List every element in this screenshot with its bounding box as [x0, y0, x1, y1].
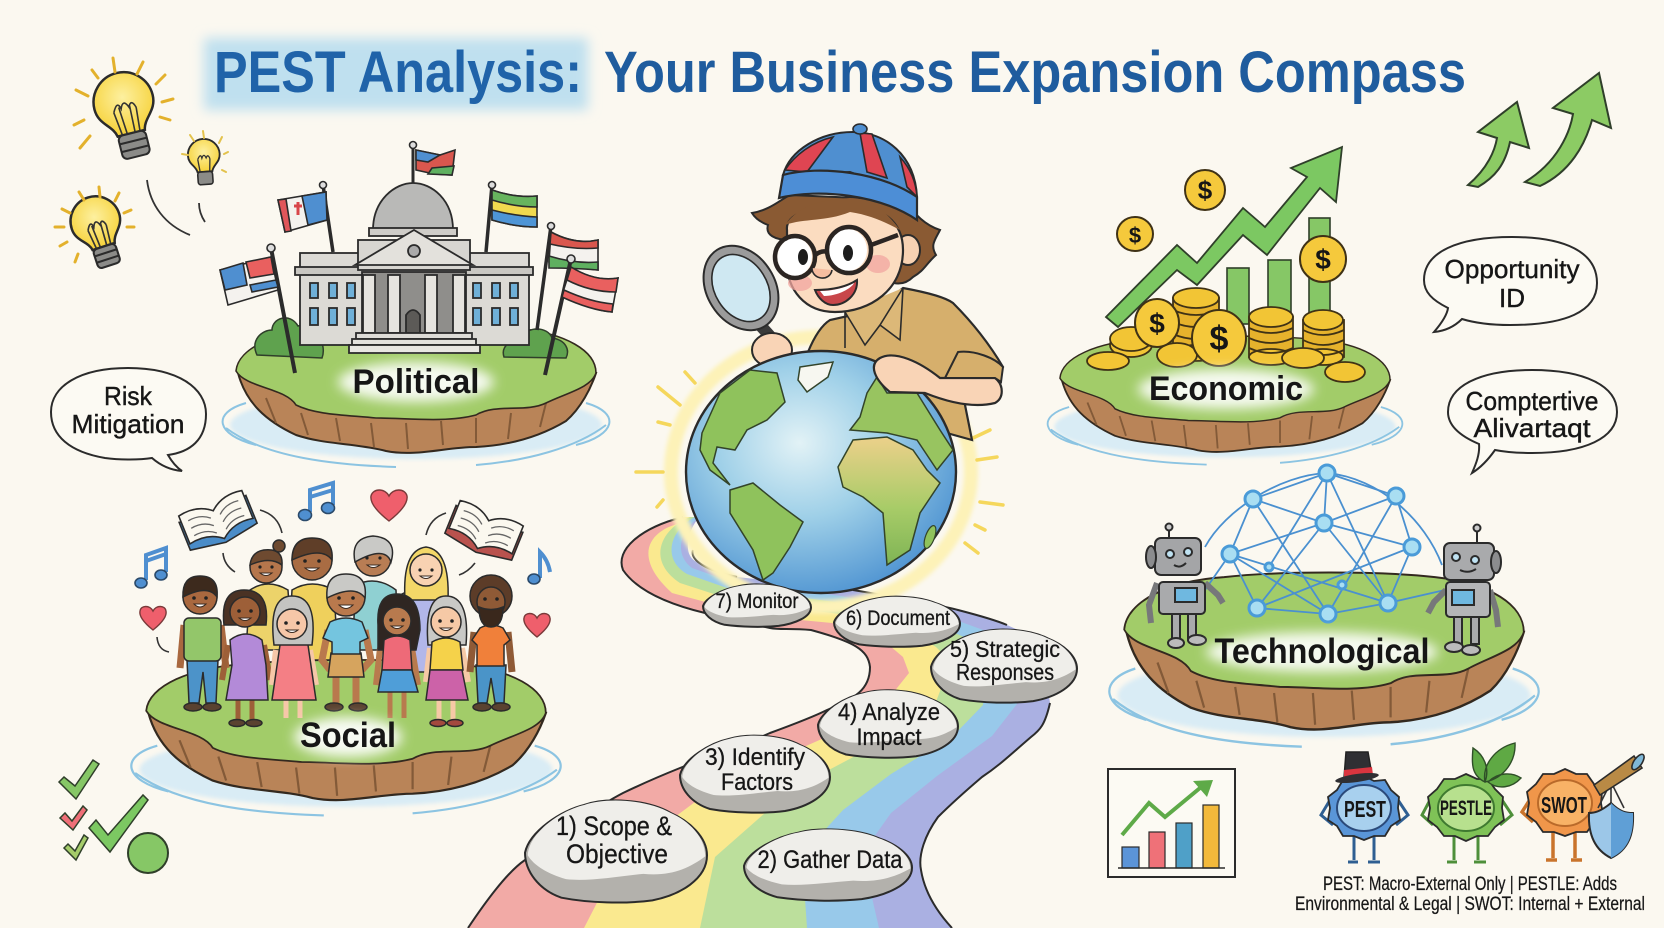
speech bubble: competitive advantage: Alivartaqt	[1474, 413, 1591, 443]
stone 2: 2) Gather Data	[758, 846, 903, 874]
stone 4: 4) Analyze	[838, 699, 940, 726]
badge: PESTLE	[1422, 743, 1521, 862]
people: back row	[246, 536, 448, 672]
panel: technological island	[1109, 465, 1539, 747]
stone 5: Responses	[956, 659, 1054, 685]
person 3	[272, 596, 316, 718]
framework characters	[1321, 743, 1646, 862]
person 5	[376, 594, 420, 718]
motion arcs	[157, 510, 475, 652]
hat button	[853, 124, 867, 134]
title: Your Business Expansion Compass	[604, 40, 1466, 105]
explorer arm over globe	[874, 352, 1003, 405]
speech bubble: opportunity id: Opportunity	[1444, 254, 1580, 284]
caption: framework comparison	[1295, 874, 1645, 915]
badge: PEST	[1321, 752, 1408, 862]
teeth	[820, 283, 854, 296]
europe and asia	[850, 377, 953, 470]
person 2	[222, 590, 270, 726]
explorer character	[688, 124, 1003, 440]
speech bubble: competitive advantage	[1448, 370, 1617, 473]
label halo	[338, 362, 494, 402]
globe glow	[636, 337, 1003, 607]
africa	[838, 437, 940, 565]
stone 1: 1) Scope &	[556, 811, 672, 841]
fringe	[785, 198, 900, 230]
stone 5: 5) Strategic	[950, 636, 1060, 662]
stone 3: Factors	[721, 769, 793, 796]
bushes	[255, 318, 567, 358]
badge: SWOT	[1522, 752, 1646, 860]
face	[787, 205, 903, 312]
stone 3	[680, 736, 830, 813]
speech bubble: opportunity id	[1424, 237, 1597, 332]
dollar signs: $	[1315, 244, 1331, 275]
hair	[752, 195, 940, 283]
dollar signs: $	[1129, 223, 1141, 248]
greenland	[798, 362, 833, 392]
green bars	[1227, 218, 1330, 324]
robot left	[1146, 524, 1223, 648]
south america	[730, 483, 803, 580]
speech bubble: competitive advantage: Comptertive	[1466, 386, 1598, 416]
speech bubble: risk mitigation	[51, 368, 206, 471]
hat stripes	[785, 133, 917, 197]
icon: light bulbs	[55, 58, 228, 273]
label halo	[1138, 369, 1314, 409]
icon: growth arrows	[1468, 73, 1611, 187]
stone 7	[703, 584, 811, 627]
ear	[896, 235, 920, 265]
label: Technological: Technological	[1214, 632, 1430, 671]
speech bubble: risk mitigation: Mitigation	[72, 409, 184, 439]
label halo	[294, 717, 402, 757]
hand left	[752, 333, 792, 367]
stone 7: 7) Monitor	[716, 590, 799, 613]
person 6	[426, 596, 468, 726]
icon: check marks	[59, 760, 168, 873]
badge: PEST: PEST	[1344, 796, 1386, 822]
madagascar	[922, 524, 938, 550]
panel: social island	[131, 483, 561, 815]
collar	[845, 288, 903, 348]
growth zigzag arrow	[1106, 147, 1342, 327]
island base	[1048, 336, 1402, 465]
panel: economic island	[1048, 147, 1402, 465]
person 4	[322, 574, 371, 711]
nose	[812, 268, 832, 278]
stone 4	[818, 690, 958, 758]
person 7	[470, 575, 512, 711]
stone 3: 3) Identify	[705, 744, 805, 771]
icon: music notes	[135, 483, 550, 588]
mouth	[815, 280, 857, 305]
dollar signs: $	[1210, 320, 1229, 358]
people: front row	[180, 556, 512, 726]
person 1	[180, 576, 226, 711]
title: PEST Analysis:	[214, 40, 582, 105]
dollar signs: $	[1149, 308, 1165, 339]
island base	[131, 660, 561, 815]
island base	[1109, 573, 1539, 747]
stepping stones	[525, 584, 1077, 903]
flags	[220, 142, 618, 375]
globe	[686, 351, 956, 593]
north america	[700, 370, 785, 485]
robot right	[1428, 524, 1501, 655]
hat band	[779, 171, 917, 220]
stone 2	[744, 829, 912, 901]
magnifier	[688, 232, 794, 345]
hat dome	[783, 132, 917, 197]
label: Social: Social	[300, 716, 396, 755]
dollar signs	[1129, 175, 1331, 358]
label: Political: Political	[352, 363, 480, 401]
dollar coins	[1117, 170, 1346, 366]
panel: political island	[220, 142, 618, 467]
icon: hearts	[140, 490, 550, 637]
faces	[192, 556, 499, 625]
label: Economic: Economic	[1149, 370, 1303, 408]
chart icon	[1108, 769, 1235, 877]
title	[204, 38, 1466, 110]
icon: open books	[177, 489, 525, 566]
island base	[223, 324, 609, 467]
glasses	[775, 227, 898, 278]
capitol building	[295, 183, 533, 353]
network dome	[1205, 465, 1445, 622]
stone 6: 6) Document	[846, 607, 950, 630]
shirt	[808, 288, 1003, 440]
stone 4: Impact	[856, 724, 922, 751]
stone 1	[525, 800, 707, 903]
speech bubble: opportunity id: ID	[1499, 283, 1525, 313]
label halo	[1206, 632, 1438, 672]
badge: PESTLE: PESTLE	[1440, 797, 1492, 820]
stone 1: Objective	[566, 839, 668, 869]
speech bubble: risk mitigation: Risk	[104, 381, 153, 411]
stone 6	[834, 597, 960, 647]
badge: SWOT: SWOT	[1541, 792, 1587, 818]
dollar signs: $	[1198, 175, 1213, 205]
stone 5	[931, 629, 1077, 703]
cheeks	[788, 255, 890, 291]
eyes	[778, 229, 867, 276]
rainbow path	[468, 517, 1050, 928]
coin stacks	[1087, 288, 1365, 382]
